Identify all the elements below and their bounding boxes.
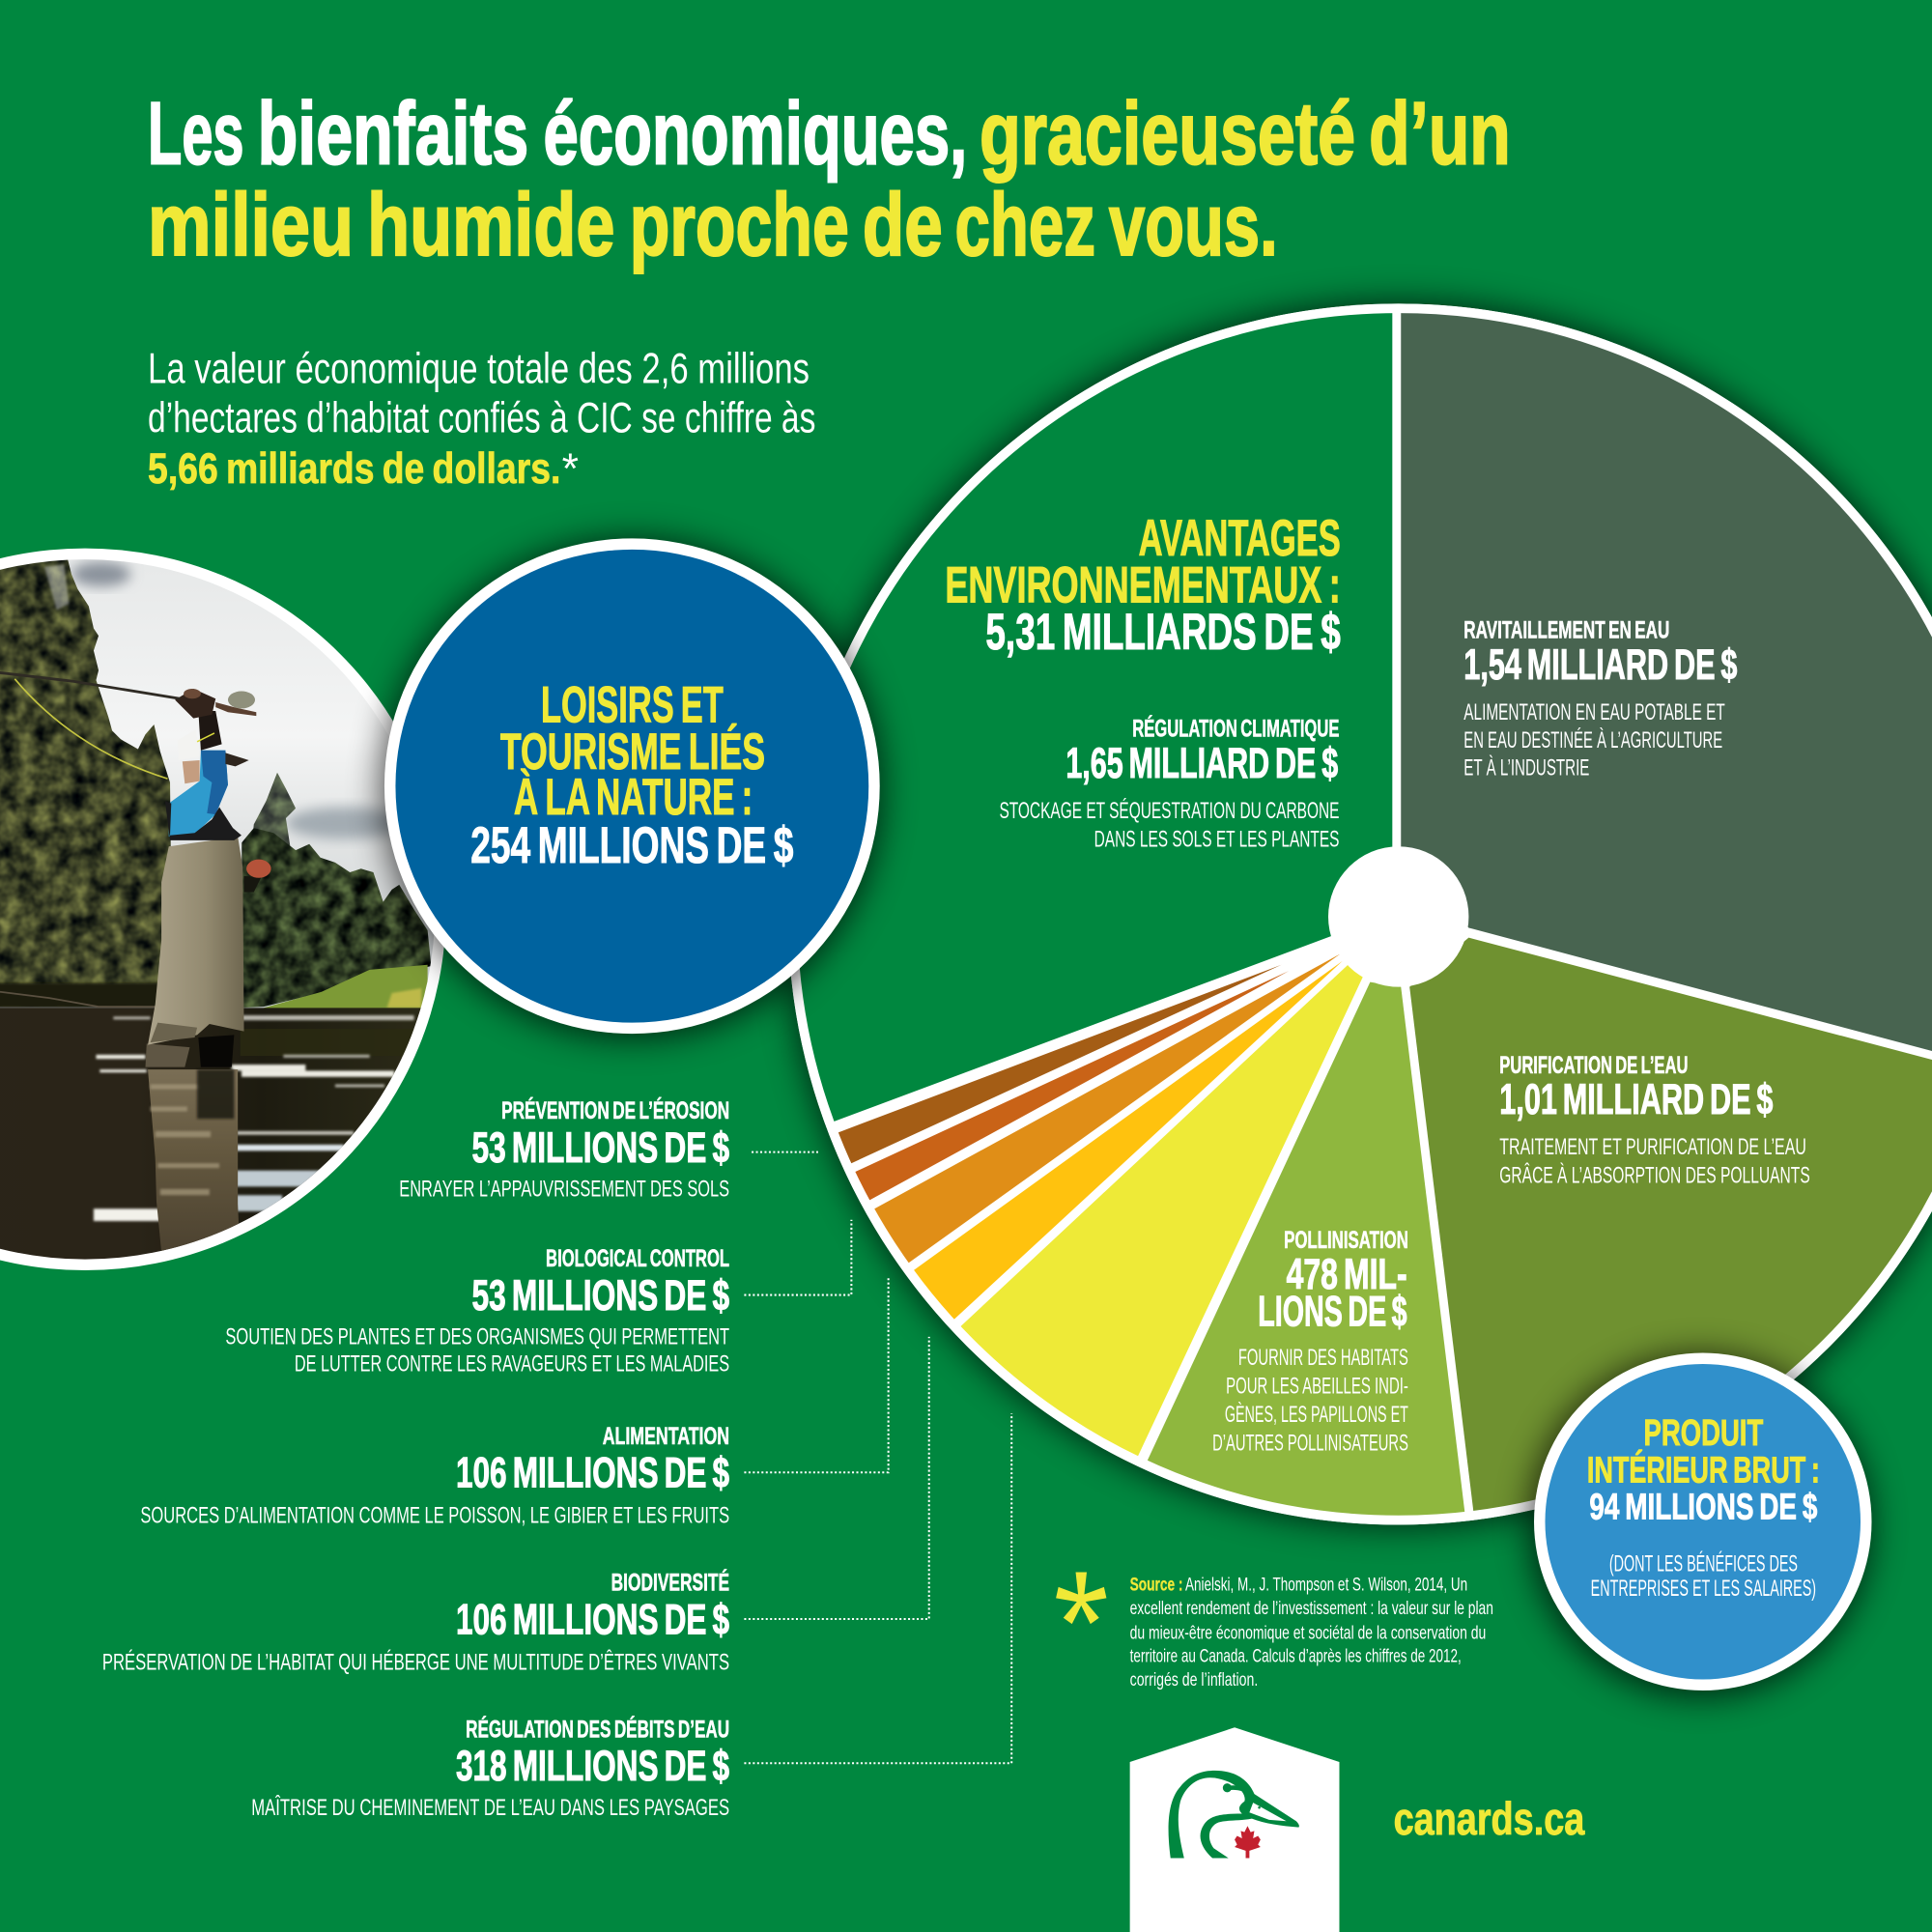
callout circle: loisirs et tourisme	[382, 538, 882, 1038]
heading: avantages environnementaux: 5,31 MILLIARDS DE $	[985, 604, 1341, 661]
title: économiques,	[543, 85, 967, 184]
title: vous.	[1109, 176, 1278, 274]
label: régulation climatique: DANS LES SOLS ET LES PLANTES	[1094, 826, 1339, 852]
list item: biological control: SOUTIEN DES PLANTES ET DES ORGANISMES QUI PERMETTENT	[225, 1324, 729, 1350]
slice: pollinisation	[1146, 982, 1465, 1519]
pie centre	[1328, 846, 1468, 987]
label: ravitaillement en eau: EN EAU DESTINÉE À L’AGRICULTURE	[1463, 727, 1722, 753]
fisherman	[146, 1043, 189, 1067]
pie rim	[793, 308, 1932, 1520]
label: ravitaillement en eau	[1463, 617, 1738, 781]
source note: Source :	[1130, 1576, 1182, 1596]
title: de	[863, 176, 943, 274]
label: pollinisation: GÈNES, LES PAPILLONS ET	[1225, 1402, 1408, 1428]
list item: biological control: DE LUTTER CONTRE LES RAVAGEURS ET LES MALADIES	[295, 1351, 729, 1378]
icon: maple leaf	[1235, 1826, 1261, 1858]
icon: yellow asterisk	[1056, 1573, 1106, 1624]
list item: prévention de l'érosion: ENRAYER L’APPAUVRISSEMENT DES SOLS	[399, 1177, 729, 1203]
heading: avantages environnementaux: AVANTAGES	[1139, 510, 1341, 567]
intro text: d’hectares d’habitat confiés à CIC se chiffre às	[148, 395, 815, 442]
title: humide	[367, 176, 614, 274]
callout circle: loisirs et tourisme: À LA NATURE :	[514, 768, 753, 826]
label: pollinisation: FOURNIR DES HABITATS	[1238, 1345, 1408, 1371]
source note: Anielski, M., J. Thompson et S. Wilson, 2014, Un	[1185, 1576, 1467, 1596]
list item: régulation des débits d'eau: 318 MILLIONS DE $	[456, 1743, 729, 1790]
slice: biodiversité	[912, 961, 1343, 1321]
list item: biological control: BIOLOGICAL CONTROL	[546, 1245, 729, 1272]
heading: avantages environnementaux	[945, 510, 1341, 661]
list item: biological control: 53 MILLIONS DE $	[472, 1272, 729, 1320]
source note: corrigés de l’inflation.	[1130, 1670, 1258, 1690]
list item: alimentation	[140, 1423, 729, 1529]
list item: régulation des débits d'eau: MAÎTRISE DU CHEMINEMENT DE L’EAU DANS LES PAYSAGES	[251, 1795, 729, 1821]
slice: unlabelled environmental area	[790, 309, 1392, 1123]
callout circle: loisirs et tourisme: TOURISME LIÉS	[500, 723, 765, 781]
label: régulation climatique: 1,65 MILLIARD DE $	[1065, 740, 1338, 787]
source note: excellent rendement de l’investissement : la valeur sur le plan	[1130, 1599, 1493, 1619]
callout circle: loisirs et tourisme: LOISIRS ET	[541, 676, 724, 733]
list item: biodiversité: BIODIVERSITÉ	[611, 1569, 729, 1597]
source note	[1130, 1576, 1493, 1690]
photo: fly fisherman in wetland	[0, 549, 469, 1292]
source note: territoire au Canada. Calculs d’après les chiffres de 2012,	[1130, 1647, 1462, 1667]
list item: prévention de l'érosion: 53 MILLIONS DE $	[472, 1124, 729, 1172]
intro text: *	[562, 445, 579, 493]
list item: prévention de l'érosion: PRÉVENTION DE L’ÉROSION	[501, 1096, 729, 1124]
label: pollinisation: LIONS DE $	[1258, 1288, 1407, 1335]
callout circle: produit intérieur brut: 94 MILLIONS DE $	[1589, 1487, 1817, 1528]
label: purification de l'eau: 1,01 MILLIARD DE $	[1499, 1076, 1774, 1123]
label: ravitaillement en eau: 1,54 MILLIARD DE $	[1463, 641, 1738, 689]
pie chart: environmental benefits	[786, 301, 1932, 1526]
heading: avantages environnementaux: ENVIRONNEMENTAUX :	[945, 557, 1341, 614]
label: pollinisation: D’AUTRES POLLINISATEURS	[1212, 1430, 1408, 1456]
label: ravitaillement en eau: ET À L’INDUSTRIE	[1463, 754, 1589, 781]
label: pollinisation	[1212, 1227, 1408, 1456]
slice: purification de l'eau	[1409, 938, 1932, 1513]
callout circle: produit intérieur brut	[1529, 1353, 1872, 1696]
intro text	[148, 346, 815, 493]
slice: prévention de l'érosion	[836, 965, 1282, 1164]
slice: régulation des débits d'eau	[958, 965, 1363, 1458]
title: d’un	[1369, 85, 1511, 184]
icon: duck head	[1169, 1771, 1299, 1858]
source note: du mieux-être économique et sociétal de la conservation du	[1130, 1623, 1486, 1643]
list item: biological control	[225, 1245, 729, 1378]
title: milieu	[148, 176, 354, 274]
dotted leader lines	[744, 1152, 1011, 1763]
label: purification de l'eau	[1499, 1052, 1810, 1188]
label: ravitaillement en eau: RAVITAILLEMENT EN EAU	[1463, 617, 1669, 644]
label: purification de l'eau: PURIFICATION DE L’EAU	[1499, 1052, 1688, 1079]
slice: ravitaillement en eau	[1401, 309, 1932, 1051]
callout circle: loisirs et tourisme: 254 MILLIONS DE $	[470, 817, 793, 874]
label: régulation climatique: RÉGULATION CLIMATIQUE	[1132, 715, 1339, 743]
title: Les	[148, 85, 244, 184]
intro text: 5,66 milliards de dollars.	[148, 445, 560, 493]
label: régulation climatique: STOCKAGE ET SÉQUESTRATION DU CARBONE	[999, 798, 1339, 824]
list item: alimentation: ALIMENTATION	[603, 1423, 729, 1450]
slice: biological control	[853, 971, 1289, 1202]
list item: alimentation: SOURCES D’ALIMENTATION COMME LE POISSON, LE GIBIER ET LES FRUITS	[140, 1503, 729, 1529]
label: pollinisation: POLLINISATION	[1284, 1227, 1408, 1254]
website url: canards.ca	[1394, 1794, 1585, 1845]
callout circle: produit intérieur brut: INTÉRIEUR BRUT :	[1587, 1448, 1820, 1491]
water reflections	[94, 1015, 414, 1221]
list item: régulation des débits d'eau: RÉGULATION DES DÉBITS D’EAU	[466, 1715, 729, 1743]
logo: white marker with duck head	[1130, 1727, 1339, 1932]
list item: prévention de l'érosion	[399, 1096, 729, 1203]
label: ravitaillement en eau: ALIMENTATION EN EAU POTABLE ET	[1463, 699, 1725, 725]
list item: régulation des débits d'eau	[251, 1715, 729, 1821]
callout circle: produit intérieur brut: PRODUIT	[1644, 1412, 1763, 1454]
list item: biodiversité: PRÉSERVATION DE L’HABITAT QUI HÉBERGE UNE MULTITUDE D’ÊTRES VIVANTS	[102, 1649, 729, 1675]
title: proche	[630, 176, 849, 274]
label: pollinisation: POUR LES ABEILLES INDI-	[1226, 1374, 1408, 1400]
title: chez	[955, 176, 1095, 274]
label: pollinisation: 478 MIL-	[1287, 1251, 1407, 1298]
label: régulation climatique	[999, 715, 1339, 852]
slice: alimentation	[872, 953, 1341, 1264]
title: bienfaits	[258, 85, 528, 184]
list item: alimentation: 106 MILLIONS DE $	[456, 1450, 729, 1497]
title	[148, 85, 1511, 274]
title: gracieuseté	[980, 85, 1355, 184]
callout circle: produit intérieur brut: (DONT LES BÉNÉFICES DES	[1609, 1550, 1798, 1576]
list item: biodiversité: 106 MILLIONS DE $	[456, 1596, 729, 1643]
intro text: La valeur économique totale des 2,6 millions	[148, 346, 810, 393]
list item: biodiversité	[102, 1569, 729, 1675]
